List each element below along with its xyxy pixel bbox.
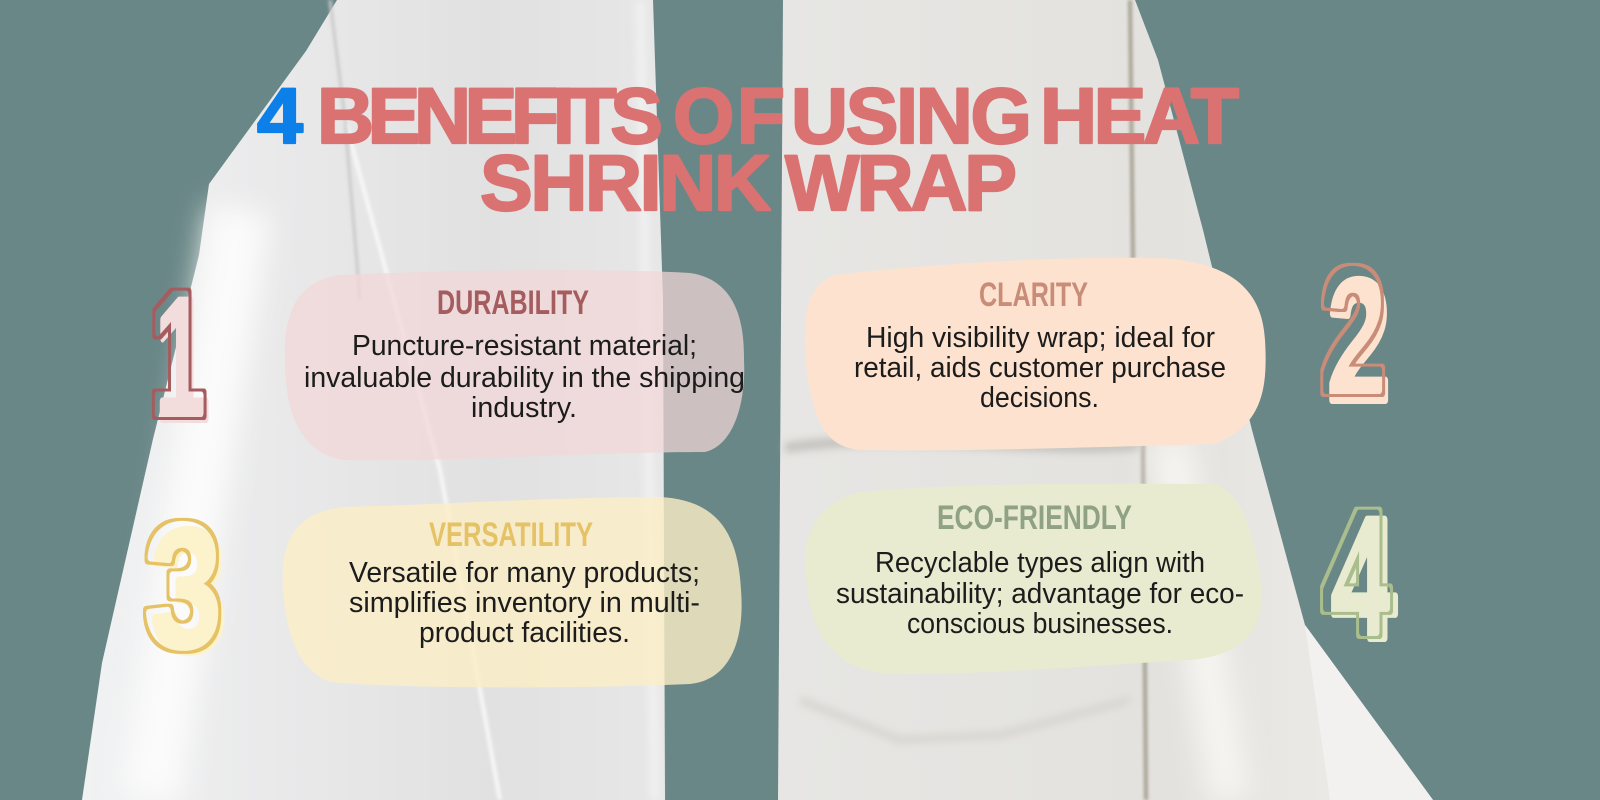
text: versatility description: product facilities. bbox=[419, 617, 630, 649]
panel: clarity bbox=[805, 258, 1266, 450]
title bbox=[257, 71, 1239, 227]
title: USING bbox=[791, 71, 1032, 160]
text: durability description: industry. bbox=[471, 392, 577, 424]
panel: durability bbox=[285, 270, 745, 460]
number 3: 3 bbox=[146, 490, 220, 682]
heading: eco-friendly: ECO-FRIENDLY bbox=[937, 499, 1132, 537]
title: HEAT bbox=[1040, 71, 1239, 160]
title: SHRINK bbox=[480, 138, 771, 227]
text: eco-friendly description: conscious businesses. bbox=[907, 608, 1173, 640]
number 2 bbox=[1322, 235, 1390, 437]
number 1 bbox=[151, 258, 209, 456]
heading: durability: DURABILITY bbox=[437, 284, 589, 322]
text: durability description bbox=[304, 330, 745, 424]
title: BENEFITS bbox=[317, 71, 663, 160]
text: versatility description bbox=[349, 557, 700, 649]
number 4: 4 bbox=[1332, 483, 1396, 675]
panel: eco-friendly bbox=[805, 484, 1262, 674]
number 1: 1 bbox=[151, 258, 204, 450]
heading: versatility: VERSATILITY bbox=[429, 516, 593, 554]
text: eco-friendly description: Recyclable types align with bbox=[875, 547, 1205, 579]
panel: versatility bbox=[283, 497, 742, 688]
text: clarity description: decisions. bbox=[980, 382, 1099, 414]
title: WRAP bbox=[785, 138, 1017, 227]
text: eco-friendly description: sustainability; advantage for eco- bbox=[836, 578, 1244, 610]
heading: clarity: CLARITY bbox=[979, 276, 1088, 314]
text: durability description: invaluable durability in the shipping bbox=[304, 362, 745, 394]
number 4: 4 bbox=[1324, 477, 1388, 669]
text: clarity description: retail, aids customer purchase bbox=[854, 352, 1226, 384]
text: clarity description: High visibility wrap; ideal for bbox=[866, 322, 1215, 354]
number 2: 2 bbox=[1328, 245, 1390, 437]
text: eco-friendly description bbox=[836, 547, 1244, 640]
number 3: 3 bbox=[152, 495, 226, 687]
number 2: 2 bbox=[1322, 235, 1384, 427]
text: versatility description: simplifies inventory in multi- bbox=[349, 587, 700, 619]
title: 4 bbox=[257, 71, 303, 160]
title: OF bbox=[673, 71, 785, 160]
text: durability description: Puncture-resistant material; bbox=[352, 330, 697, 362]
number 1: 1 bbox=[156, 264, 209, 456]
text: clarity description bbox=[854, 322, 1226, 414]
text: versatility description: Versatile for many products; bbox=[349, 557, 700, 589]
